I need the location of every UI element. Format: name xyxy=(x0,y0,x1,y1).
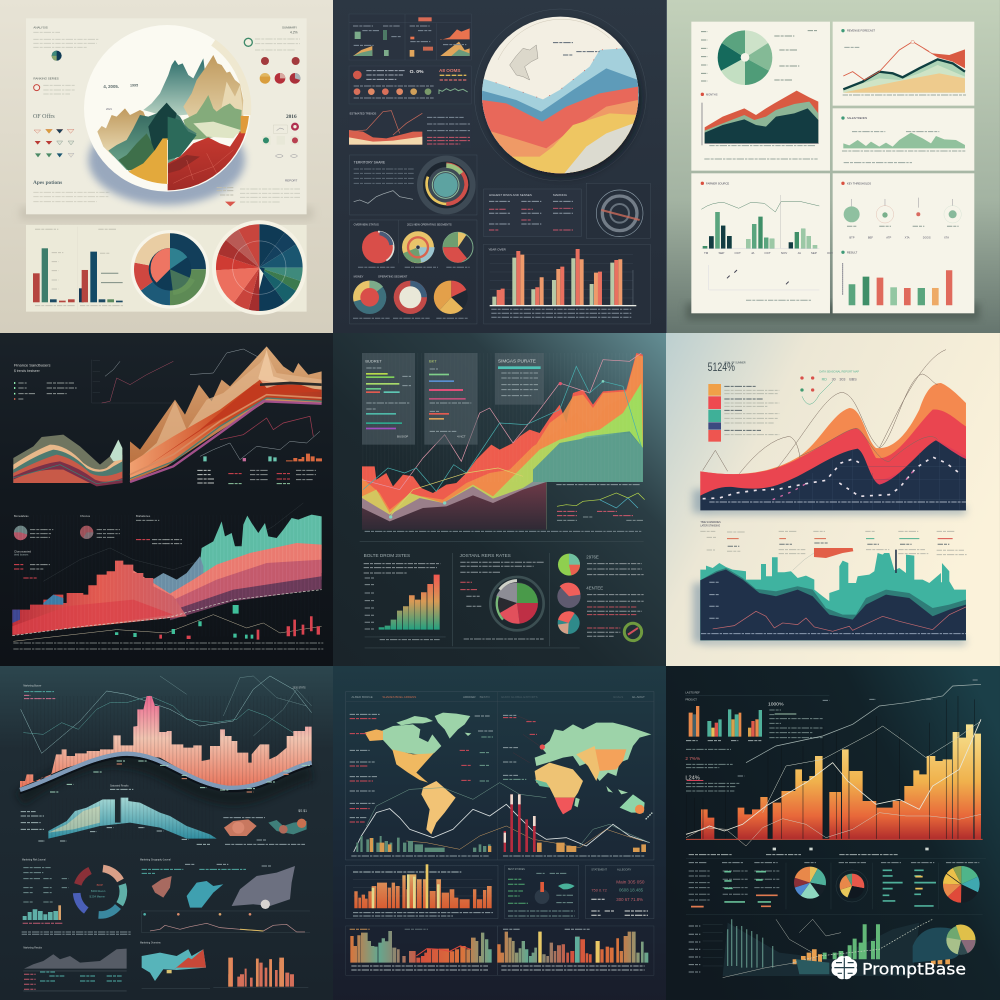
upper card xyxy=(26,18,307,214)
small donuts and captions: tried bosses xyxy=(14,553,29,557)
gauge panel: BEST STORIES xyxy=(508,869,525,871)
stats panel: 750 0.72 xyxy=(591,887,608,892)
KPI panel xyxy=(349,66,471,104)
card: small green area chart: SALES/TRENDS xyxy=(847,116,867,120)
gauge panel xyxy=(505,865,579,919)
teal wave bars: Saturated Results xyxy=(110,784,129,787)
heading and legend: GOAL OF SUMMER xyxy=(724,361,746,364)
panel: pale green dashboard tile xyxy=(666,0,1000,334)
KPI panel: A8 OOMS xyxy=(439,68,460,73)
mountain circle: 2021 xyxy=(106,107,112,111)
right column icons and text: 4.2% xyxy=(290,30,298,34)
right column icons and text: REPORT xyxy=(285,179,298,183)
card: gauges and bars: RESULT xyxy=(847,251,858,255)
grouped bar chart: YEAR OVER xyxy=(488,248,507,252)
lower left colored bars xyxy=(346,926,497,975)
heading and legend: BBS xyxy=(849,378,857,382)
small donuts and captions: Chronos xyxy=(80,514,91,518)
bottom right maps and bars xyxy=(140,941,308,989)
donut charts panel: OVERVIEW STATUS xyxy=(354,223,379,227)
floating maps top right: $S $1 xyxy=(298,809,307,813)
heading and legend: 5124% xyxy=(708,360,735,374)
donut block: $ 254 Mareer xyxy=(89,894,105,898)
left column text and icons: OF Offrs xyxy=(33,113,55,120)
lower captions xyxy=(700,521,967,570)
frame and header: SHARES BDEL ARDENS xyxy=(382,695,416,699)
donut block: $304 Reven xyxy=(91,889,106,893)
glass panels: SIMGAS PURATE xyxy=(498,358,536,363)
top left mini charts xyxy=(685,691,829,791)
top left mini charts: 1000% xyxy=(768,701,784,707)
watermark logo xyxy=(832,956,966,979)
lines above: Marketing Buzzer xyxy=(23,685,42,688)
mountain circle: 4, 2005. xyxy=(103,84,119,89)
donut block xyxy=(22,858,132,934)
small donuts and captions xyxy=(14,503,303,581)
panel: wave bars tile xyxy=(0,666,334,1000)
glass panels: 4 NCT xyxy=(457,435,466,439)
panel: vivid area chart tile xyxy=(333,333,667,667)
wave area chart xyxy=(700,350,966,510)
area chart panel xyxy=(349,110,470,145)
teal and navy skyline chart xyxy=(700,550,966,640)
card: pie and area: MONTHS xyxy=(706,93,718,97)
stats panel: STATEMENT xyxy=(591,867,607,871)
panel: mountain infographic tile xyxy=(0,0,334,334)
legend heading xyxy=(14,362,77,399)
donut charts panel xyxy=(350,220,477,324)
card: bars with line: TM SEP OCT JA OCT NOV JA SEP OCT xyxy=(704,251,834,255)
wave shadow xyxy=(20,760,312,799)
right column icons and text: SUMMARY xyxy=(282,25,297,29)
globe shadow xyxy=(486,22,640,177)
large stacked area bars xyxy=(12,515,322,636)
radar panel xyxy=(586,183,650,238)
frame and header: BESTO xyxy=(480,695,490,699)
card: small green area chart xyxy=(833,108,974,171)
right lines and candles xyxy=(197,416,322,484)
card: gauges and bars xyxy=(833,173,974,313)
legend heading: Finance Sandbusers xyxy=(14,362,51,367)
small donuts and captions: Cloncwasted xyxy=(14,549,31,553)
stats panel: Main 305 050 xyxy=(616,879,645,884)
frame and header xyxy=(346,692,654,860)
middle table text and pies xyxy=(686,855,986,909)
right small line chart xyxy=(365,485,645,531)
bottom left dark chart: Marketing Results xyxy=(23,946,43,949)
text table panel: HIGHEST RISKS AND SENSES xyxy=(489,193,532,197)
top left mini charts: PRODUCT xyxy=(685,700,697,702)
layered area chart xyxy=(362,353,643,530)
heading and legend: 30 xyxy=(832,378,836,382)
bottom right maps and bars: Marketing Overview xyxy=(140,941,161,944)
watermark logo: PromptBase xyxy=(862,959,966,978)
card: bars with line: FARMER SOURCE xyxy=(706,181,729,185)
frame and header: ALBED BORGE xyxy=(351,695,373,699)
pie chart left xyxy=(131,230,209,309)
ring panel xyxy=(350,155,477,215)
lower right colored bars xyxy=(497,926,654,975)
small donuts and captions: Brahationes xyxy=(136,514,151,518)
frame and header: ARDDER xyxy=(463,695,476,699)
maps block: Marketing Geography Journal xyxy=(140,858,171,861)
frame and header: EL ARGT xyxy=(632,695,645,699)
maps block xyxy=(140,858,310,933)
left column text and icons: RANKING SERIES xyxy=(33,76,59,80)
panel: dark dashboard with globe tile xyxy=(333,0,667,334)
frame and header: EURO GLOBAL EXPORTS xyxy=(501,695,538,699)
card: pie and area xyxy=(691,22,830,171)
donut block: Marketing Risk Journal xyxy=(22,858,46,861)
bottom chart xyxy=(686,914,983,978)
pink wave bars xyxy=(20,696,313,793)
grouped bar chart xyxy=(484,244,650,324)
lower bar chart: BOLTE DROM 2STES xyxy=(364,553,410,558)
circle shadow xyxy=(84,140,250,210)
legend heading: $ trends bestseer xyxy=(14,369,41,373)
teal wave bars xyxy=(21,784,217,844)
right column icons and text xyxy=(217,25,301,206)
glass panels: BUSIOP xyxy=(397,435,408,439)
eurasia africa map xyxy=(535,723,652,819)
lines above: 2020 STATS xyxy=(293,686,306,689)
bottom left dark chart xyxy=(23,946,127,991)
bar charts xyxy=(33,227,123,310)
KPI panel: O. 0% xyxy=(410,69,424,75)
card: top line area chart: REVENUE FORECAST xyxy=(847,29,875,33)
floating maps top right xyxy=(223,809,307,844)
top left mini charts: 2 7%% xyxy=(685,756,700,761)
globe layered chart xyxy=(482,17,643,180)
right pies and text xyxy=(557,554,644,641)
panel: world map tile xyxy=(333,666,667,1000)
line chart top xyxy=(92,349,260,403)
text table panel xyxy=(484,189,581,237)
heading and legend: RD xyxy=(822,378,827,382)
right column icons and text: 2016 xyxy=(286,114,297,120)
lower bar chart xyxy=(360,541,644,648)
panel: cream red wave tile xyxy=(666,333,1000,667)
text table panel: MARKING xyxy=(553,193,568,197)
small charts cluster xyxy=(349,14,471,60)
frame and header: GOALS xyxy=(613,695,623,699)
lower candlestick strip xyxy=(12,590,323,649)
center ring chart xyxy=(460,553,544,639)
panel: dark mountain-line chart tile xyxy=(0,333,334,667)
donut charts panel: MONEY xyxy=(354,274,364,278)
center ring chart: JOSTANL RERS RATES xyxy=(460,553,511,558)
card: gauges and bars: BTP BEF ATP XTA DOOS XTA xyxy=(849,236,949,240)
area chart panel: ESTIMATED TRENDS xyxy=(350,111,377,115)
glass panels: BUDRET xyxy=(365,358,382,363)
stats panel: 0608 18.485 xyxy=(619,887,644,892)
left column text and icons: Apes potions xyxy=(33,180,62,186)
stats panel: ALLEGORY xyxy=(617,867,631,871)
left column text and icons: ANALYSIS xyxy=(33,25,48,29)
left layered wave xyxy=(13,435,122,486)
lines above xyxy=(21,676,312,753)
left column text and icons xyxy=(33,25,110,202)
pie chart right xyxy=(212,220,307,315)
chart shadows xyxy=(693,490,966,645)
map lines and bars xyxy=(351,783,650,856)
glass panels: BKT xyxy=(429,358,437,363)
top left mini charts: L24% xyxy=(685,775,700,781)
bottom right globe xyxy=(913,925,976,963)
ring panel: TERRITORY SHARE xyxy=(354,160,386,164)
stats panel xyxy=(586,865,654,919)
card: gauges and bars: KEY THRESHOLDS xyxy=(847,181,871,185)
small donuts and captions: Bomelabcas xyxy=(14,514,29,518)
right pies and text: 4ENTEE xyxy=(586,586,603,591)
mountain circle: 1995 xyxy=(130,84,138,88)
top left mini charts: LASTS REF xyxy=(685,691,700,695)
americas map xyxy=(365,713,471,834)
stats panel: 300 67 71.8% xyxy=(616,897,643,902)
main amber bars xyxy=(686,680,983,850)
map labels xyxy=(350,714,540,822)
right pies and text: 2976E xyxy=(586,555,599,560)
heading and legend: DATA SEASONAL REPORT MAP xyxy=(819,369,859,373)
card: top line area chart xyxy=(833,22,974,106)
lower captions: LATER STANDING xyxy=(700,524,720,527)
donut charts panel: 2021 NEW OPERATING SEGMENTS xyxy=(407,223,452,227)
heading and legend: 303 xyxy=(839,378,845,382)
donut block: BOP xyxy=(97,883,103,887)
mountain circle xyxy=(84,25,254,193)
lower captions: TIME SUMMARIES xyxy=(700,521,721,524)
lower card xyxy=(26,225,307,312)
panel: amber bars tile xyxy=(666,666,1000,1000)
card: bars with line xyxy=(691,173,834,313)
right mountain range xyxy=(130,346,322,482)
orange bar panel xyxy=(346,864,498,919)
glass panels xyxy=(362,353,544,445)
donut charts panel: OPERATING SEGMENT xyxy=(378,274,408,278)
heading and legend xyxy=(708,360,859,442)
